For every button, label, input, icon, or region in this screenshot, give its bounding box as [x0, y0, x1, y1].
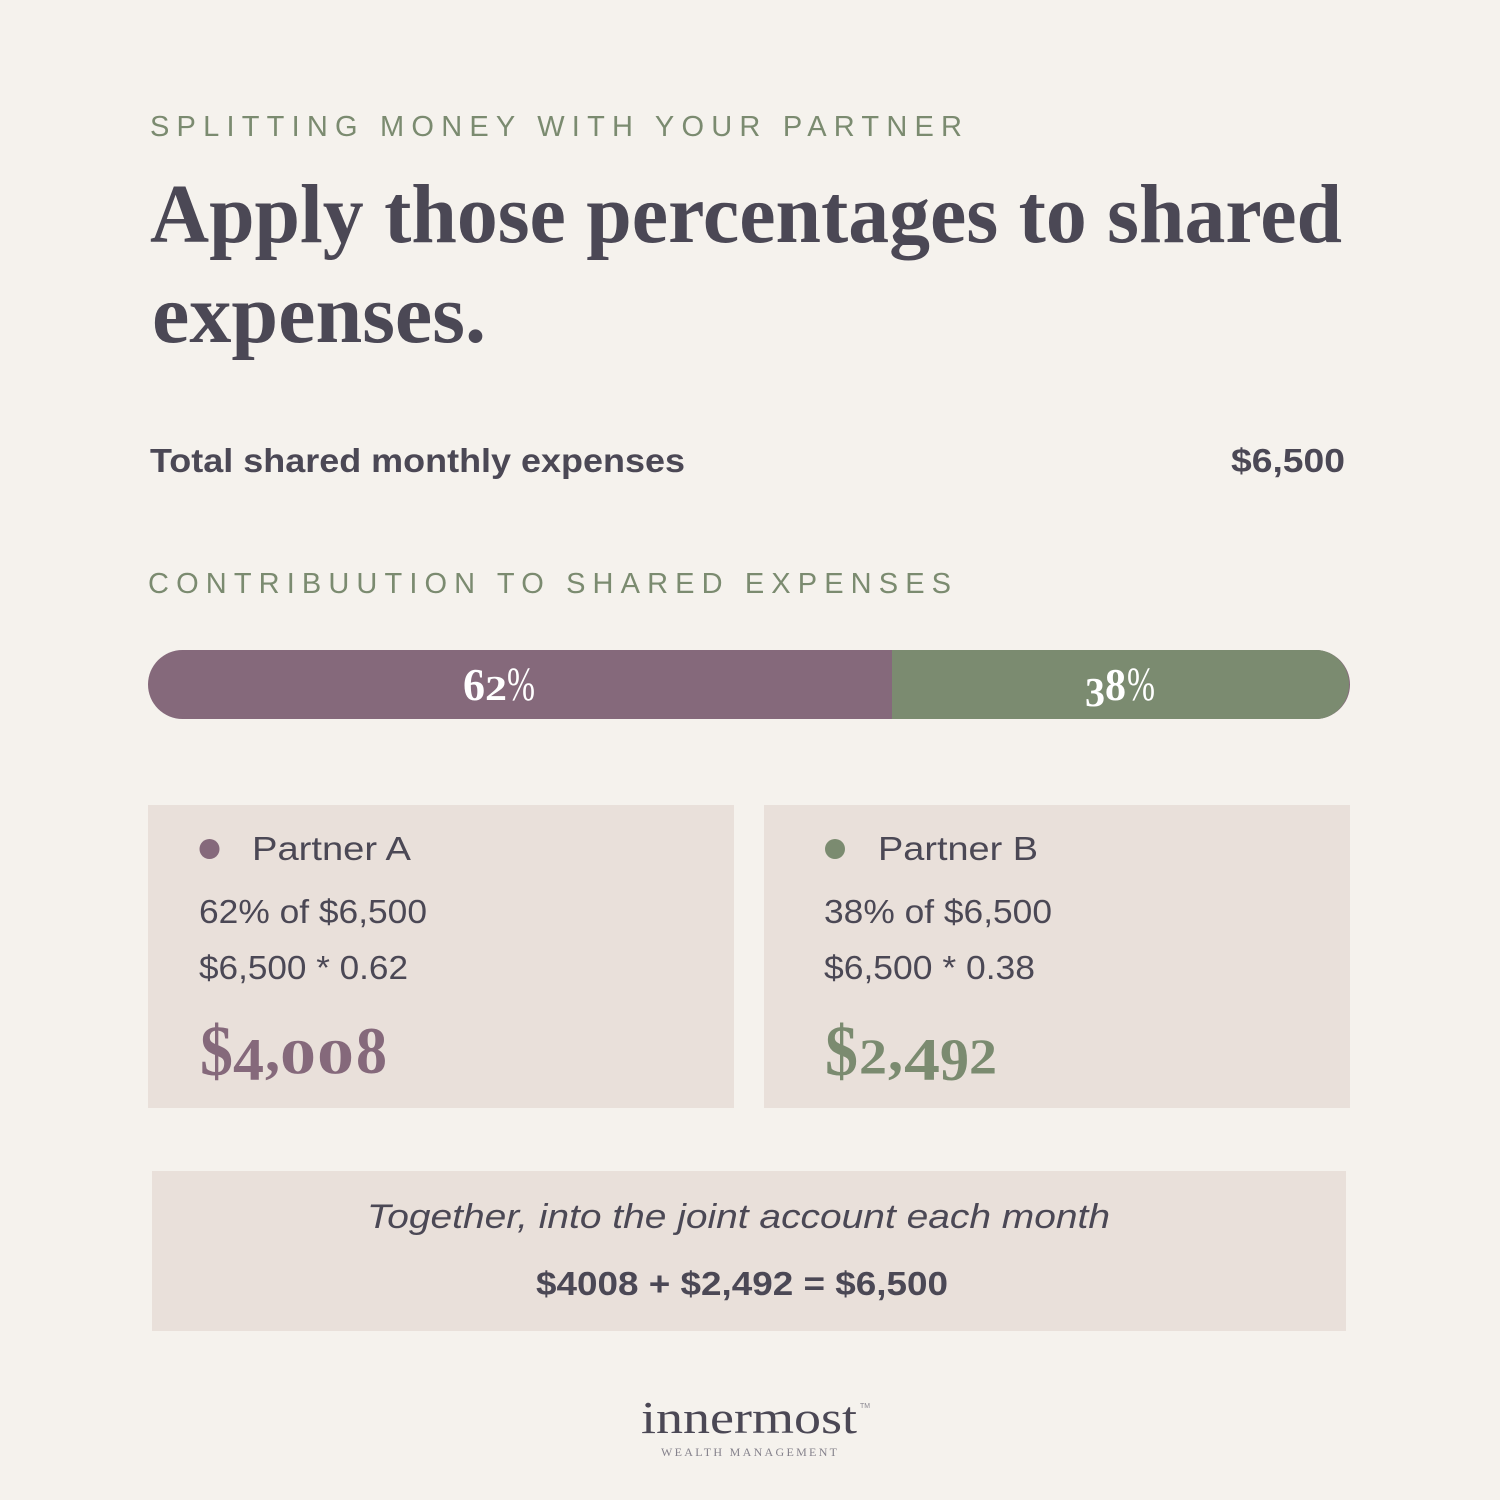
- partner A name: Partner A: [252, 830, 411, 867]
- bar label: 62%: %: [507, 658, 535, 711]
- partner B name: Partner B: [878, 830, 1038, 867]
- title: expenses.: [152, 268, 486, 361]
- partner B amount: 4: [904, 1027, 940, 1093]
- partner A amount: 8: [356, 1014, 387, 1088]
- logo: innermost: [641, 1392, 857, 1443]
- total shared expenses row: $6,500: [1231, 442, 1345, 479]
- joint caption: Together, into the joint account each month: [367, 1198, 1110, 1236]
- bar label: 62%: 2: [485, 669, 507, 708]
- icon: partner B dot: [825, 839, 845, 859]
- partner B formula: $6,500 * 0.38: [824, 949, 1035, 986]
- total shared expenses row: [150, 442, 1345, 479]
- partner A formula: $6,500 * 0.62: [199, 949, 408, 986]
- partner A amount: 4: [233, 1027, 264, 1093]
- partner B amount: ,: [888, 1018, 903, 1084]
- joint equation: $4008 + $2,492 = $6,500: [536, 1265, 948, 1302]
- partner A amount: ,: [265, 1018, 280, 1084]
- bar label: 38%: %: [1127, 658, 1155, 711]
- partner A amount: 0: [280, 1029, 316, 1084]
- total shared expenses row: Total shared monthly expenses: [150, 442, 685, 479]
- partner A share: 62% of $6,500: [199, 893, 427, 930]
- partner B amount: 2: [969, 1028, 997, 1084]
- partner B amount: 9: [940, 1027, 969, 1093]
- bar label: 38%: 8: [1105, 660, 1126, 710]
- partner B amount: $: [825, 1011, 858, 1091]
- panel: partner A: [148, 805, 734, 1108]
- panel: partner B: [764, 805, 1350, 1108]
- icon: partner A dot: [200, 839, 220, 859]
- title: Apply those percentages to shared: [150, 168, 1342, 261]
- partner B amount: 2: [859, 1028, 887, 1084]
- title: [150, 168, 1342, 361]
- section heading: contribution: CONTRIBUUTION TO SHARED EXPENSES: [148, 568, 951, 600]
- partner B share: 38% of $6,500: [824, 893, 1052, 930]
- logo: TM: [860, 1403, 870, 1410]
- eyebrow heading: SPLITTING MONEY WITH YOUR PARTNER: [150, 111, 962, 143]
- stacked percentage bar: [148, 650, 1350, 719]
- bar label: 38%: 3: [1085, 669, 1105, 715]
- partner A amount: $: [200, 1011, 233, 1091]
- bar label: 62%: 6: [463, 660, 485, 710]
- logo: [641, 1392, 870, 1459]
- logo: WEALTH MANAGEMENT: [661, 1445, 838, 1459]
- panel: joint total: [152, 1171, 1346, 1331]
- partner A amount: 0: [317, 1029, 354, 1084]
